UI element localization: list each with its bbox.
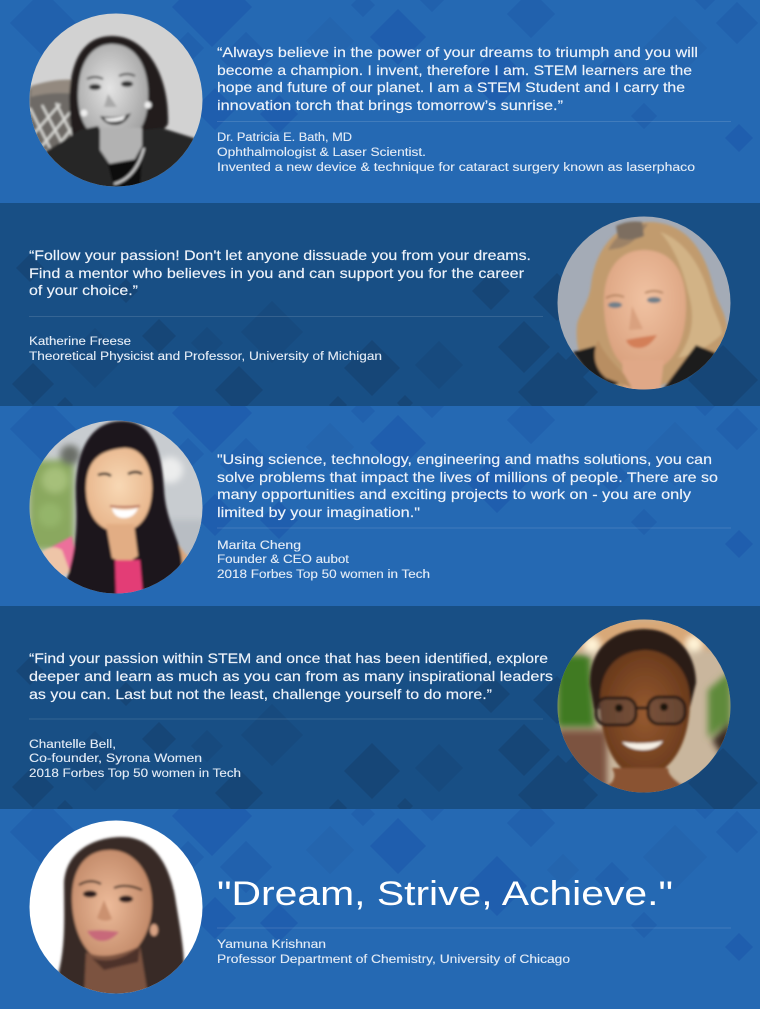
attribution: Chantelle Bell: Co-founder, Syrona Women (29, 751, 202, 765)
panel: Yamuna Krishnan (30, 809, 752, 994)
attribution: Yamuna Krishnan: Yamuna Krishnan (217, 937, 326, 951)
quote: Patricia Bath: become a champion. I invent, therefore I am. STEM learners are the (217, 62, 692, 78)
quote: Marita Cheng: many opportunities and exciting projects to work on - you are only (217, 486, 691, 502)
attribution: Katherine Freese: Katherine Freese (29, 334, 131, 348)
portrait: Yamuna Krishnan (29, 820, 203, 997)
quote: Patricia Bath: hope and future of our planet. I am a STEM Student and I carry the (217, 79, 685, 95)
attribution: Katherine Freese (29, 334, 382, 363)
portrait: Marita Cheng (29, 420, 205, 599)
attribution: Chantelle Bell (29, 737, 241, 780)
portrait: Chantelle Bell (557, 619, 731, 798)
attribution: Marita Cheng (217, 538, 430, 581)
quote: Marita Cheng: solve problems that impact the lives of millions of people. There are so (217, 469, 718, 485)
attribution: Marita Cheng: Marita Cheng (217, 538, 301, 552)
portrait: Patricia Bath (30, 14, 202, 186)
quote: Katherine Freese (29, 247, 531, 298)
quote: Chantelle Bell (29, 650, 553, 702)
attribution: Patricia Bath: Ophthalmologist & Laser Scientist. (217, 145, 426, 159)
attribution: Yamuna Krishnan (217, 937, 570, 966)
quote: Patricia Bath: “Always believe in the power of your dreams to triumph and you will (217, 44, 698, 60)
attribution: Patricia Bath: Invented a new device & technique for cataract surgery known as laserphaco (217, 160, 695, 174)
quote: Patricia Bath (217, 44, 698, 113)
panel: Katherine Freese (0, 203, 760, 406)
quote: Katherine Freese: of your choice.” (29, 282, 138, 298)
quote: Marita Cheng: "Using science, technology, engineering and maths solutions, you can (217, 451, 712, 467)
portrait: Katherine Freese (557, 216, 731, 393)
quote: Katherine Freese: Find a mentor who believes in you and can support you for the career (29, 265, 524, 281)
attribution: Yamuna Krishnan: Professor Department of Chemistry, University of Chicago (217, 952, 570, 966)
panel: Marita Cheng (30, 406, 752, 594)
panel: Patricia Bath (30, 0, 752, 186)
attribution: Chantelle Bell: 2018 Forbes Top 50 women in Tech (29, 766, 241, 780)
attribution: Patricia Bath (217, 130, 695, 174)
attribution: Patricia Bath: Dr. Patricia E. Bath, MD (217, 130, 352, 144)
headline quote: Dream, Strive, Achieve: "Dream, Strive, Achieve." (217, 875, 673, 913)
attribution: Katherine Freese: Theoretical Physicist and Professor, University of Michigan (29, 349, 382, 363)
quote: Chantelle Bell: as you can. Last but not the least, challenge yourself to do more.” (29, 686, 492, 702)
attribution: Marita Cheng: Founder & CEO aubot (217, 552, 350, 566)
quote: Chantelle Bell: “Find your passion within STEM and once that has been identified, explore (29, 650, 548, 666)
quote: Chantelle Bell: deeper and learn as much as you can from as many inspirational leaders (29, 668, 553, 684)
attribution: Chantelle Bell: Chantelle Bell, (29, 737, 116, 751)
quote: Marita Cheng: limited by your imagination." (217, 504, 420, 520)
quote: Katherine Freese: “Follow your passion! Don't let anyone dissuade you from your dreams. (29, 247, 531, 263)
panel: Chantelle Bell (0, 606, 760, 809)
attribution: Marita Cheng: 2018 Forbes Top 50 women in Tech (217, 567, 430, 581)
quote: Patricia Bath: innovation torch that brings tomorrow’s sunrise.” (217, 97, 563, 113)
quote: Marita Cheng (217, 451, 718, 520)
